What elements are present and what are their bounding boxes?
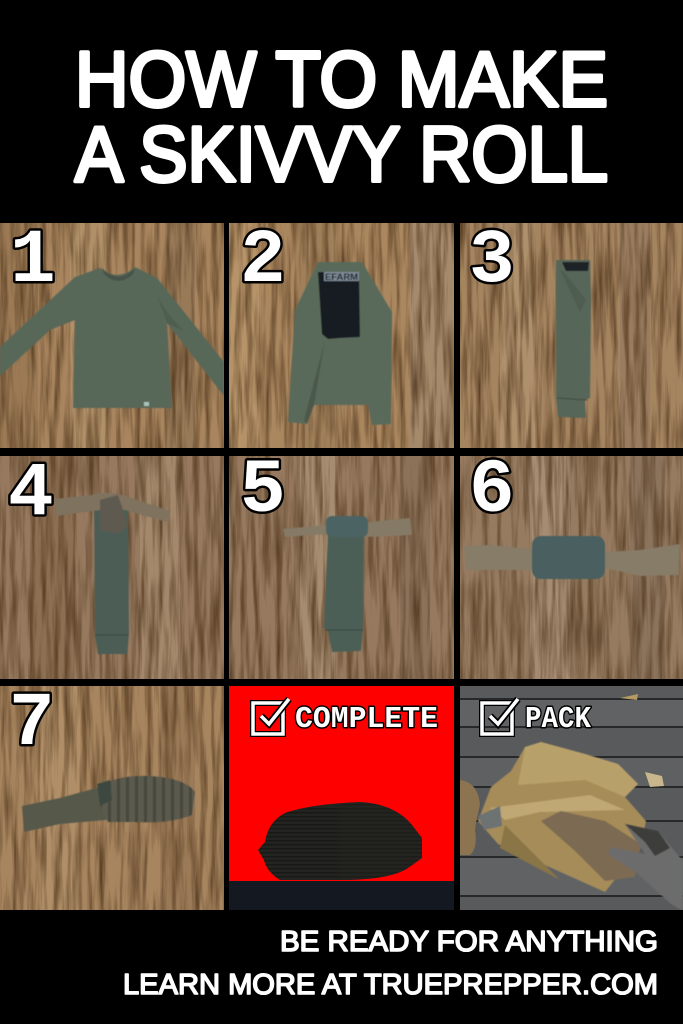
sock roll with tail — [22, 776, 195, 832]
checkbox icon — [253, 699, 289, 734]
tan bag — [478, 742, 646, 892]
panel: step 5 — [229, 448, 454, 679]
panel: step 1 — [0, 218, 224, 448]
step number 2: 2 — [240, 218, 286, 304]
strip with sock band — [54, 493, 170, 654]
shirt with shorts on top — [288, 262, 392, 425]
black shorts — [318, 272, 360, 339]
glove — [608, 824, 683, 911]
step number 5: 5 — [240, 448, 286, 534]
panel: step 7 — [0, 681, 224, 910]
panel: step 2 — [229, 218, 454, 448]
dry leaf — [645, 772, 664, 787]
step number 3: 3 — [469, 218, 515, 304]
panel: step 6 — [460, 448, 683, 679]
title: HOW TO MAKE — [75, 35, 608, 123]
panel: step 3 — [460, 218, 683, 448]
footer text: BE READY FOR ANYTHING — [280, 926, 658, 958]
title: A SKIVVY ROLL — [75, 110, 608, 198]
label: pack: PACK — [525, 702, 591, 737]
title — [75, 35, 608, 198]
black shorts: EFARM — [325, 272, 358, 282]
shirt folded to strip — [556, 260, 591, 418]
panel: step 4 — [0, 451, 224, 679]
boot — [460, 780, 480, 855]
step number 4: 4 — [8, 451, 54, 537]
table edge — [229, 881, 454, 910]
label: complete: COMPLETE — [295, 702, 438, 737]
panel: complete — [229, 686, 454, 910]
sock in bag — [541, 811, 641, 881]
roll with sock ends — [464, 536, 680, 579]
shirt laid flat — [0, 267, 224, 408]
checkbox icon — [482, 699, 518, 734]
footer text — [123, 926, 658, 1001]
step number 7: 7 — [9, 681, 55, 767]
strip with roll and sock band — [283, 516, 412, 652]
footer text: LEARN MORE AT TRUEPREPPER.COM — [123, 969, 658, 1001]
finished roll — [258, 802, 422, 880]
step number 6: 6 — [469, 448, 515, 534]
step number 1: 1 — [10, 218, 56, 304]
panel: pack — [460, 686, 683, 911]
